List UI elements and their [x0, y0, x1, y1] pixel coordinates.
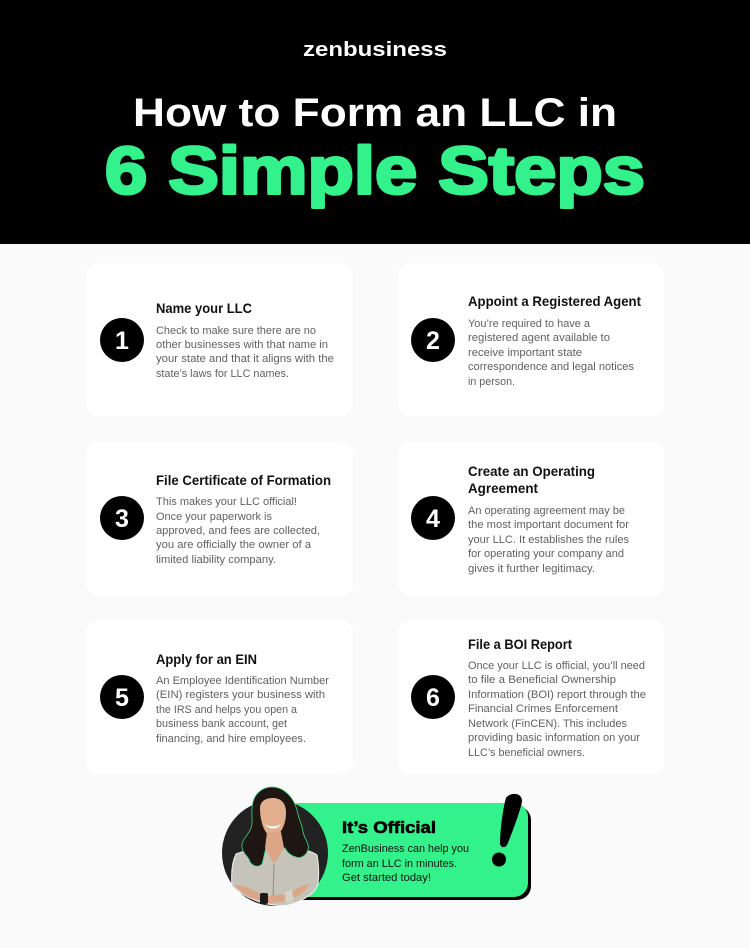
panel: step 3: [86, 442, 353, 596]
number badge 2: 2: [426, 327, 440, 355]
panel: step 2: [398, 263, 664, 416]
number badge 2: [411, 318, 455, 362]
header band: [0, 0, 750, 244]
text: step 4: gives it further legitimacy.: [468, 563, 595, 575]
text: step 6: LLC’s beneficial owners.: [468, 747, 585, 759]
text: step 1: [156, 325, 334, 380]
text: step 6: Financial Crimes Enforcement: [468, 703, 618, 715]
text: step 6: to file a Beneficial Ownership: [468, 674, 616, 686]
text: step 6: Once your LLC is official, you’ll need: [468, 660, 645, 672]
text: step 5: [156, 675, 329, 745]
text: step 2: You’re required to have a: [468, 318, 591, 330]
heading: step 4: Create an Operating: [468, 463, 595, 479]
icon: exclamation mark: [492, 794, 522, 866]
text: step 6: Network (FinCEN). This includes: [468, 718, 627, 730]
callout text: ZenBusiness can help you: [342, 843, 469, 855]
heading: step 2: Appoint a Registered Agent: [468, 293, 641, 309]
text: step 5: financing, and hire employees.: [156, 733, 306, 745]
number badge 3: [100, 496, 144, 540]
heading: step 3: File Certificate of Formation: [156, 472, 331, 488]
text: step 2: in person.: [468, 376, 515, 388]
number badge 1: 1: [115, 327, 129, 355]
callout box: [285, 803, 531, 900]
text: step 4: [468, 505, 629, 575]
text: step 1: your state and that it aligns with the: [156, 353, 334, 365]
text: step 4: for operating your company and: [468, 548, 624, 560]
title line 2: 6 Simple Steps: [105, 134, 645, 208]
title line 1: How to Form an LLC in: [133, 91, 617, 135]
heading: step 5: Apply for an EIN: [156, 651, 257, 667]
text: step 4: An operating agreement may be: [468, 505, 625, 517]
panel: step 5: [86, 620, 353, 774]
number badge 4: [411, 496, 455, 540]
text: step 5: business bank account, get: [156, 718, 287, 730]
text: step 6: providing basic information on your: [468, 732, 640, 744]
heading: step 1: Name your LLC: [156, 300, 252, 316]
number badge 6: 6: [426, 684, 440, 712]
text: step 3: Once your paperwork is: [156, 511, 272, 523]
number badge 4: 4: [426, 505, 440, 533]
text: step 5: (EIN) registers your business with: [156, 689, 325, 701]
text: step 3: approved, and fees are collected,: [156, 525, 320, 537]
text: step 1: Check to make sure there are no: [156, 325, 316, 337]
text: step 2: registered agent available to: [468, 332, 610, 344]
text: step 2: correspondence and legal notices: [468, 361, 634, 373]
number badge 5: 5: [115, 684, 129, 712]
panel: step 6: [398, 620, 664, 774]
text: step 5: An Employee Identification Number: [156, 675, 329, 687]
text: step 2: receive important state: [468, 347, 582, 359]
text: step 3: limited liability company.: [156, 554, 276, 566]
text: step 6: [468, 660, 646, 759]
callout: It's Official: [222, 787, 531, 906]
heading: step 6: File a BOI Report: [468, 636, 572, 652]
text: step 2: [468, 318, 634, 388]
callout text: form an LLC in minutes.: [342, 858, 457, 870]
text: step 6: Information (BOI) report through the: [468, 689, 646, 701]
number badge 3: 3: [115, 505, 129, 533]
text: step 5: the IRS and helps you open a: [156, 704, 298, 716]
heading: step 4: [468, 463, 595, 496]
number badge 1: [100, 318, 144, 362]
heading: step 4: Agreement: [468, 480, 538, 496]
logo: zenbusiness: zenbusiness: [303, 38, 447, 61]
text: step 1: other businesses with that name in: [156, 339, 328, 351]
text: step 3: This makes your LLC official!: [156, 496, 297, 508]
number badge 6: [411, 675, 455, 719]
panel: step 1: [86, 263, 353, 416]
callout heading: It’s Official: [342, 818, 436, 837]
portrait: smiling woman: [222, 787, 328, 906]
panel: step 4: [398, 442, 664, 596]
number badge 5: [100, 675, 144, 719]
text: step 1: state’s laws for LLC names.: [156, 368, 289, 380]
callout text: Get started today!: [342, 872, 431, 884]
text: step 4: the most important document for: [468, 519, 629, 531]
text: step 4: your LLC. It establishes the rules: [468, 534, 629, 546]
callout text: [342, 843, 469, 884]
text: step 3: you are officially the owner of a: [156, 539, 312, 551]
text: step 3: [156, 496, 320, 566]
